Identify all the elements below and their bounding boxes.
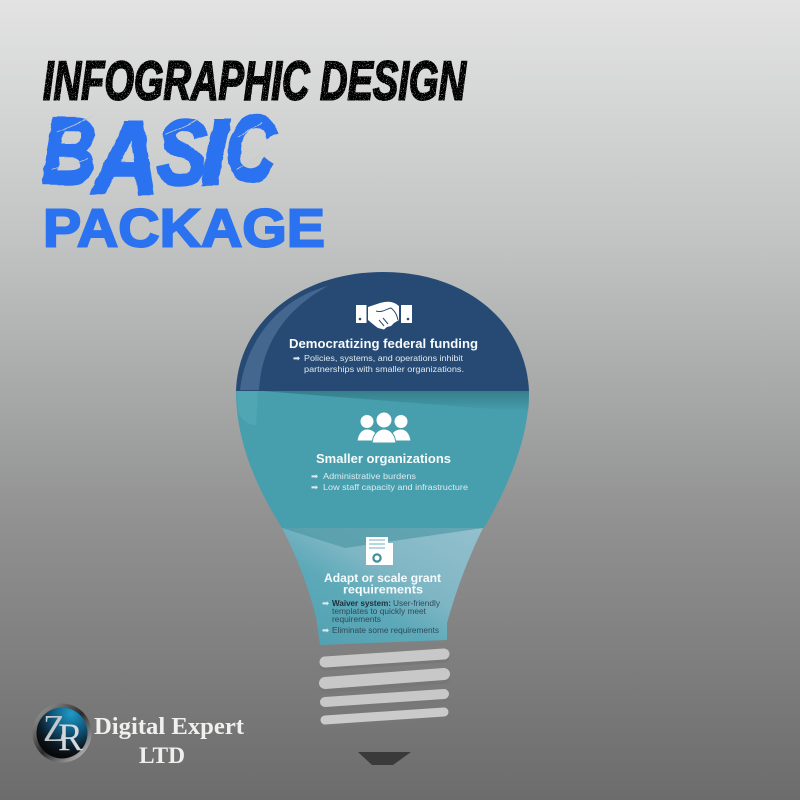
- text block: Waiver system:: [332, 599, 391, 608]
- text block: ➡: [311, 482, 319, 492]
- title: basic: B: [42, 101, 96, 203]
- logo: LTD: [139, 743, 185, 768]
- heading: [324, 571, 441, 596]
- text block: partnerships with smaller organizations.: [304, 364, 464, 374]
- title: infographic design: INFOGRAPHIC DESIGN: [43, 50, 467, 112]
- panel: adapt or scale grant requirements: [282, 528, 483, 645]
- logo emblem: [32, 704, 92, 762]
- text block: ➡: [322, 625, 330, 635]
- text block: ➡: [293, 353, 301, 363]
- logo: [32, 704, 244, 768]
- text block: ➡: [322, 598, 330, 608]
- text block: Low staff capacity and infrastructure: [323, 482, 468, 492]
- title: basic: A: [90, 101, 159, 215]
- icon: checklist with gear: [366, 537, 393, 565]
- light bulb: [236, 272, 529, 765]
- heading: Adapt or scale grant: [324, 571, 441, 585]
- text block: Policies, systems, and operations inhibit: [304, 353, 464, 363]
- text block: [293, 353, 464, 374]
- bulb screw threads: [325, 654, 444, 723]
- icon: handshake: [356, 302, 412, 330]
- title: basic: I: [201, 102, 229, 204]
- heading: Smaller organizations: [316, 451, 451, 466]
- title: basic: C: [226, 98, 277, 200]
- text block: User-friendly: [393, 599, 440, 608]
- panel: smaller organizations: [236, 391, 529, 528]
- title: basic: [42, 98, 277, 215]
- text block: Eliminate some requirements: [332, 626, 439, 635]
- glass highlight: [240, 286, 328, 390]
- text block: ➡: [311, 471, 319, 481]
- title: package: PACKAGE: [43, 198, 325, 258]
- text block: [322, 598, 440, 635]
- panel: democratizing federal funding: [236, 272, 529, 391]
- text block: [311, 471, 468, 492]
- text block: templates to quickly meet: [332, 607, 427, 616]
- company name: Digital Expert: [94, 714, 244, 740]
- text block: Administrative burdens: [323, 471, 416, 481]
- text block: requirements: [332, 615, 381, 624]
- title: basic: S: [157, 102, 207, 204]
- bulb base tip: [358, 752, 411, 765]
- logo emblem: R: [58, 716, 83, 759]
- heading: requirements: [343, 582, 423, 596]
- heading: Democratizing federal funding: [289, 336, 478, 351]
- logo emblem: Z: [43, 708, 65, 750]
- icon: people: [357, 412, 411, 443]
